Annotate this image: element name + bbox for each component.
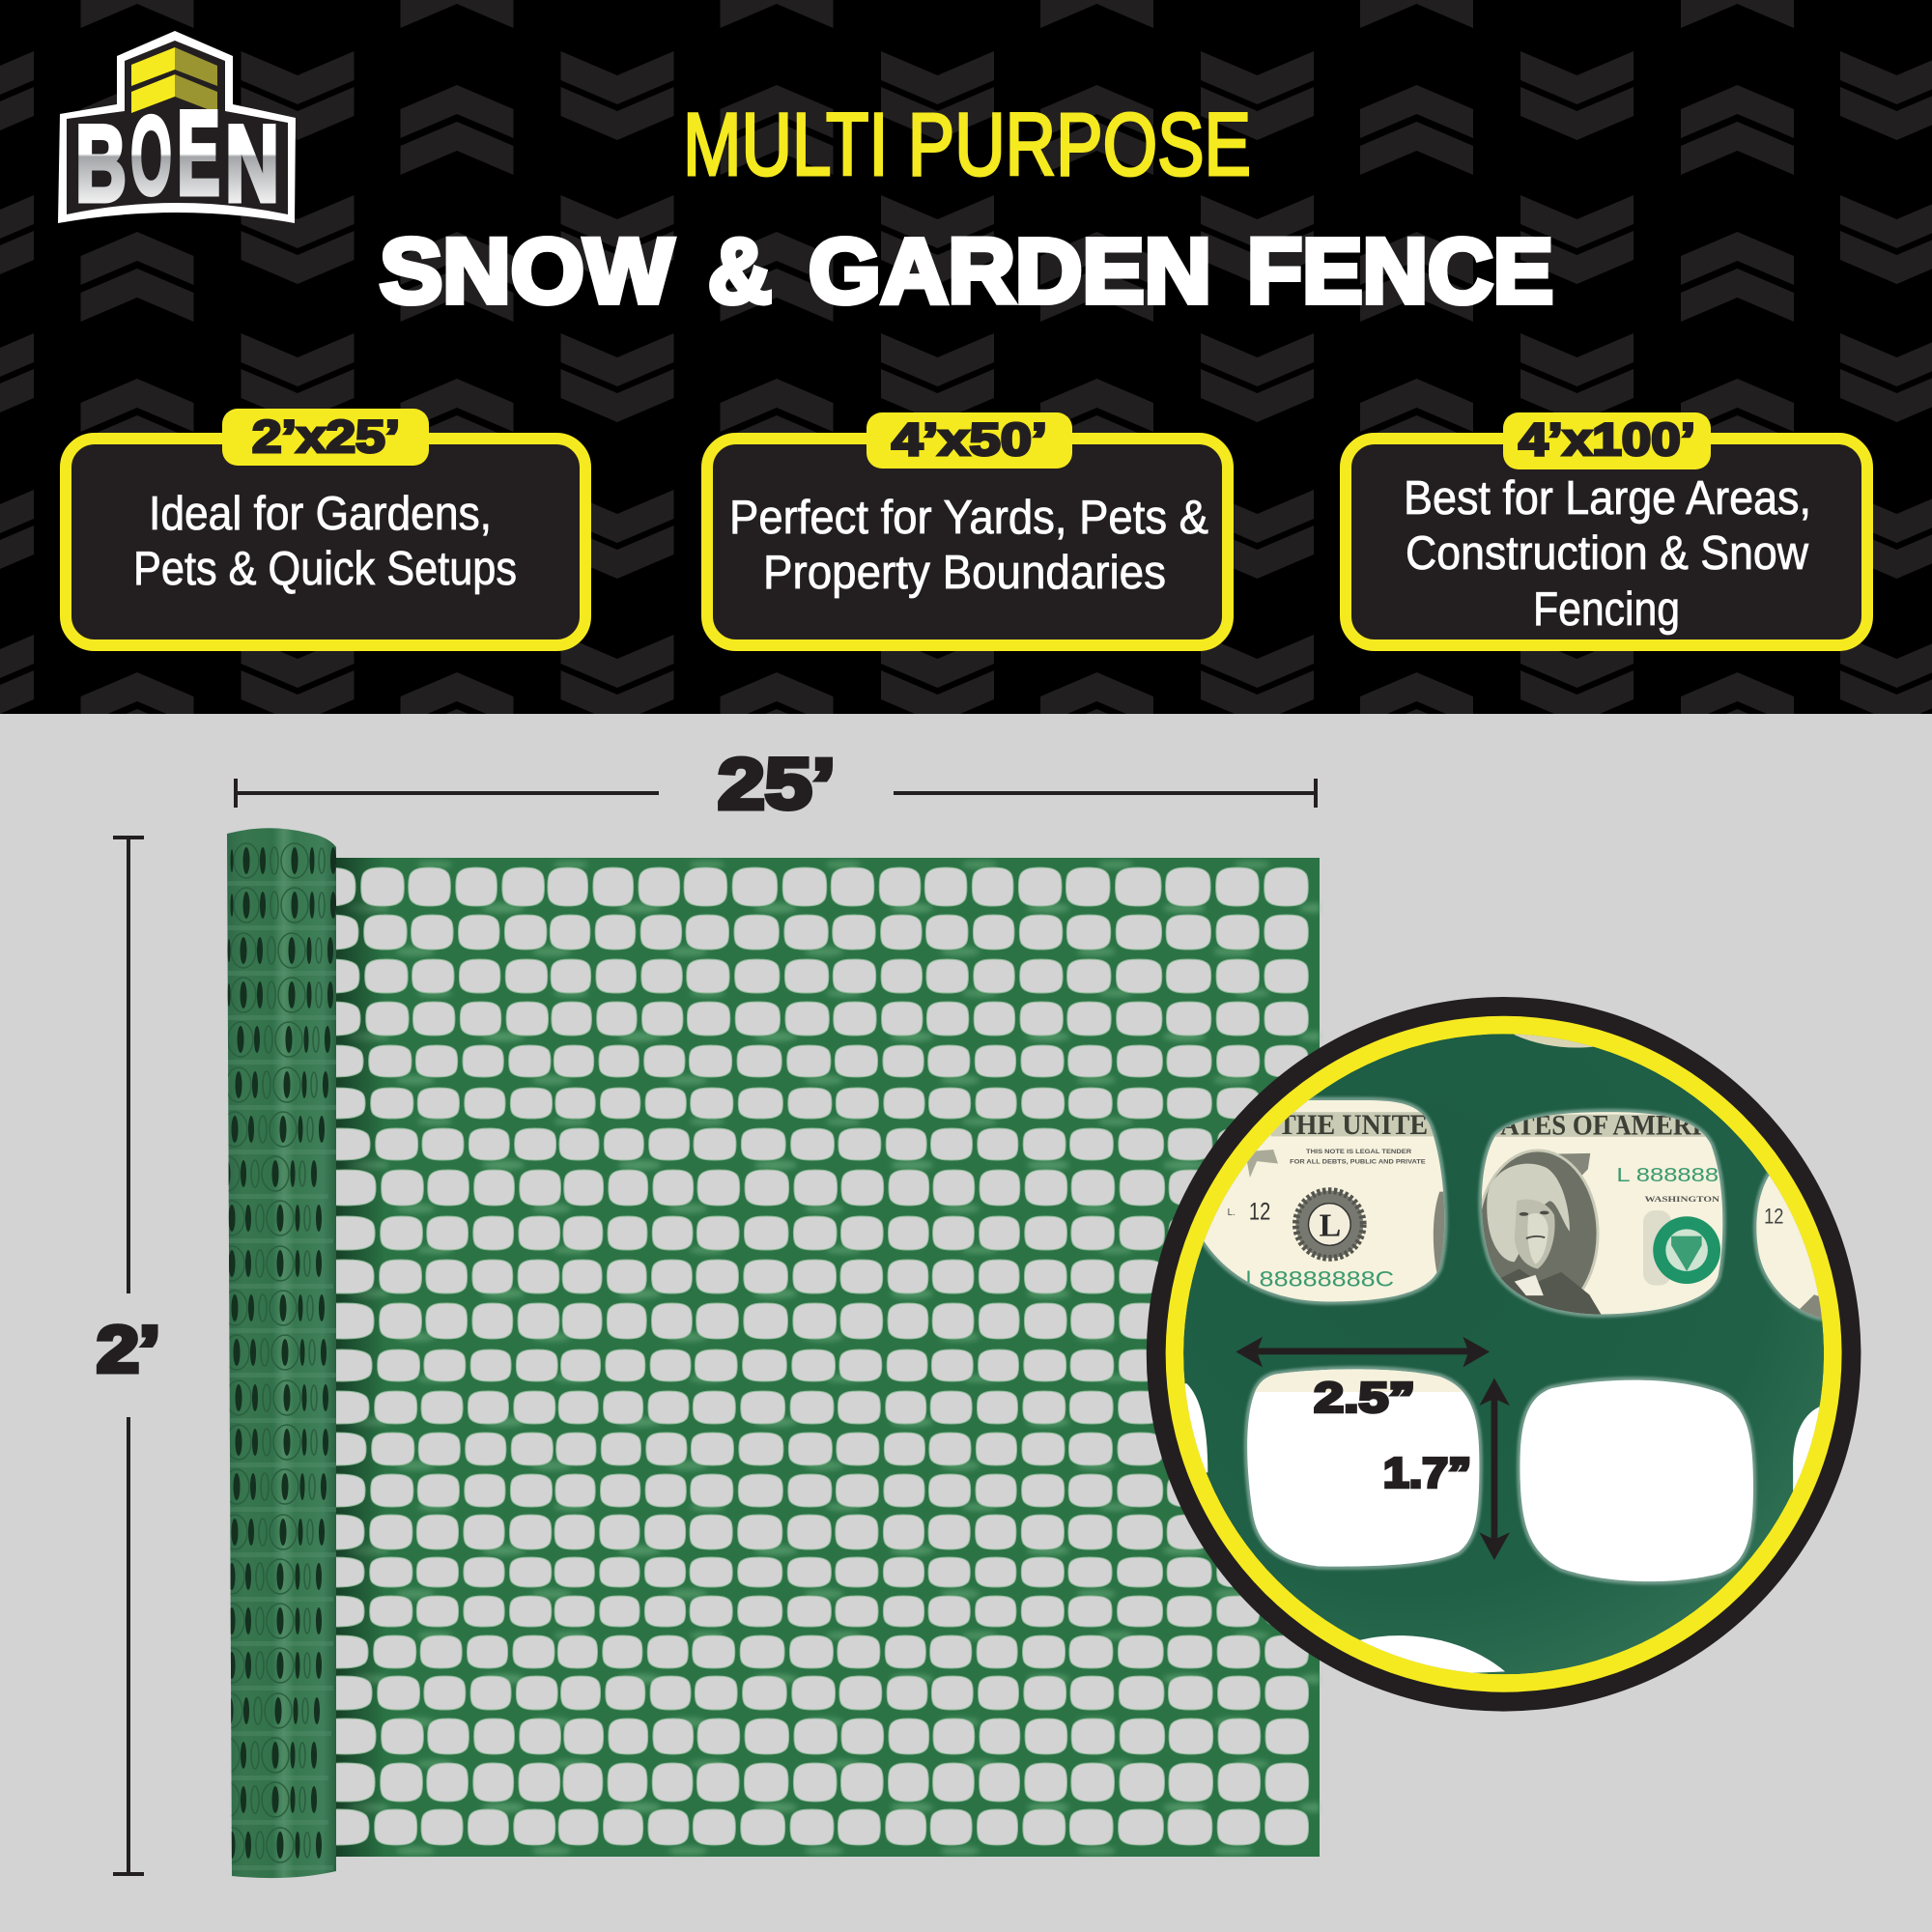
dollar bill seen through center hole: WASHINGTON bbox=[1644, 1195, 1719, 1204]
dollar bill seen through center hole: L 888888 bbox=[1616, 1165, 1719, 1186]
callout: magnified mesh circle bbox=[1147, 997, 1861, 1712]
dollar bill seen through left hole: L bbox=[1320, 1208, 1341, 1244]
title: snow and garden fence: & bbox=[708, 220, 772, 323]
dollar bill seen through right hole: 12 bbox=[1764, 1205, 1783, 1229]
dollar bill seen through left hole: THE UNITE bbox=[1278, 1108, 1428, 1141]
logo: BOEN: E bbox=[177, 87, 220, 220]
dollar bill seen through center hole bbox=[1482, 1112, 1723, 1314]
logo: BOEN: O bbox=[130, 93, 172, 218]
panel: 4x100 bbox=[1346, 412, 1867, 645]
panel: 4x50 bbox=[707, 412, 1228, 645]
panel: 4x100: Best for Large Areas, bbox=[1404, 472, 1811, 525]
panel: 4x50: Perfect for Yards, Pets & bbox=[729, 492, 1208, 544]
label: 2.5 inch: 2.5” bbox=[1314, 1375, 1415, 1421]
panel: 4x50: 4’x50’ bbox=[892, 413, 1047, 465]
panel: 2x25: 2’x25’ bbox=[252, 411, 400, 462]
logo: BOEN bbox=[58, 31, 296, 224]
logo: BOEN: B bbox=[75, 103, 127, 224]
title: multi purpose: MULTI PURPOSE bbox=[683, 96, 1251, 194]
panel: 2x25: Pets & Quick Setups bbox=[133, 543, 517, 595]
hole with white background bbox=[1247, 1369, 1479, 1567]
title: snow and garden fence: SNOW bbox=[380, 220, 673, 323]
dollar bill seen through left hole: 12 bbox=[1249, 1199, 1270, 1226]
arrow: hole width bbox=[1236, 1337, 1490, 1367]
black header band bbox=[0, 0, 1932, 762]
fence roll bbox=[227, 828, 336, 1878]
dollar bill seen through right hole bbox=[1756, 1175, 1822, 1318]
title: snow and garden fence: GARDEN bbox=[809, 220, 1211, 323]
panel: 2x25: Ideal for Gardens, bbox=[149, 488, 492, 540]
dollar bill seen through left hole: THIS NOTE IS LEGAL TENDER bbox=[1306, 1149, 1412, 1155]
dimension: height 2 ft bbox=[97, 838, 160, 1874]
panel: 2x25 bbox=[66, 409, 585, 645]
arrow: hole height bbox=[1479, 1378, 1510, 1560]
label: 1.7 inch: 1.7” bbox=[1383, 1450, 1471, 1496]
dollar bill seen through left hole: FOR ALL DEBTS, PUBLIC AND PRIVATE bbox=[1290, 1158, 1426, 1165]
logo: BOEN: N bbox=[225, 103, 279, 224]
title: snow and garden fence: FENCE bbox=[1247, 220, 1553, 323]
dollar bill seen through center hole: ATES OF AMERI bbox=[1500, 1108, 1702, 1141]
title: snow and garden fence bbox=[380, 220, 1553, 323]
green mesh fence bbox=[294, 858, 1320, 1857]
dollar bill seen through left hole bbox=[1204, 1100, 1445, 1302]
dimension: width 25 ft bbox=[236, 744, 1316, 824]
dollar bill seen through left hole: L. bbox=[1228, 1208, 1236, 1218]
dimension: height 2 ft: 2’ bbox=[97, 1313, 160, 1386]
panel: 4x100: Construction & Snow bbox=[1406, 527, 1809, 580]
panel: 4x100: 4’x100’ bbox=[1519, 413, 1695, 465]
dimension: width 25 ft: 25’ bbox=[718, 744, 836, 824]
panel: 4x100: Fencing bbox=[1533, 583, 1680, 636]
panel: 4x50: Property Boundaries bbox=[763, 547, 1166, 599]
dollar bill seen through left hole: | 88888888C bbox=[1245, 1266, 1394, 1291]
